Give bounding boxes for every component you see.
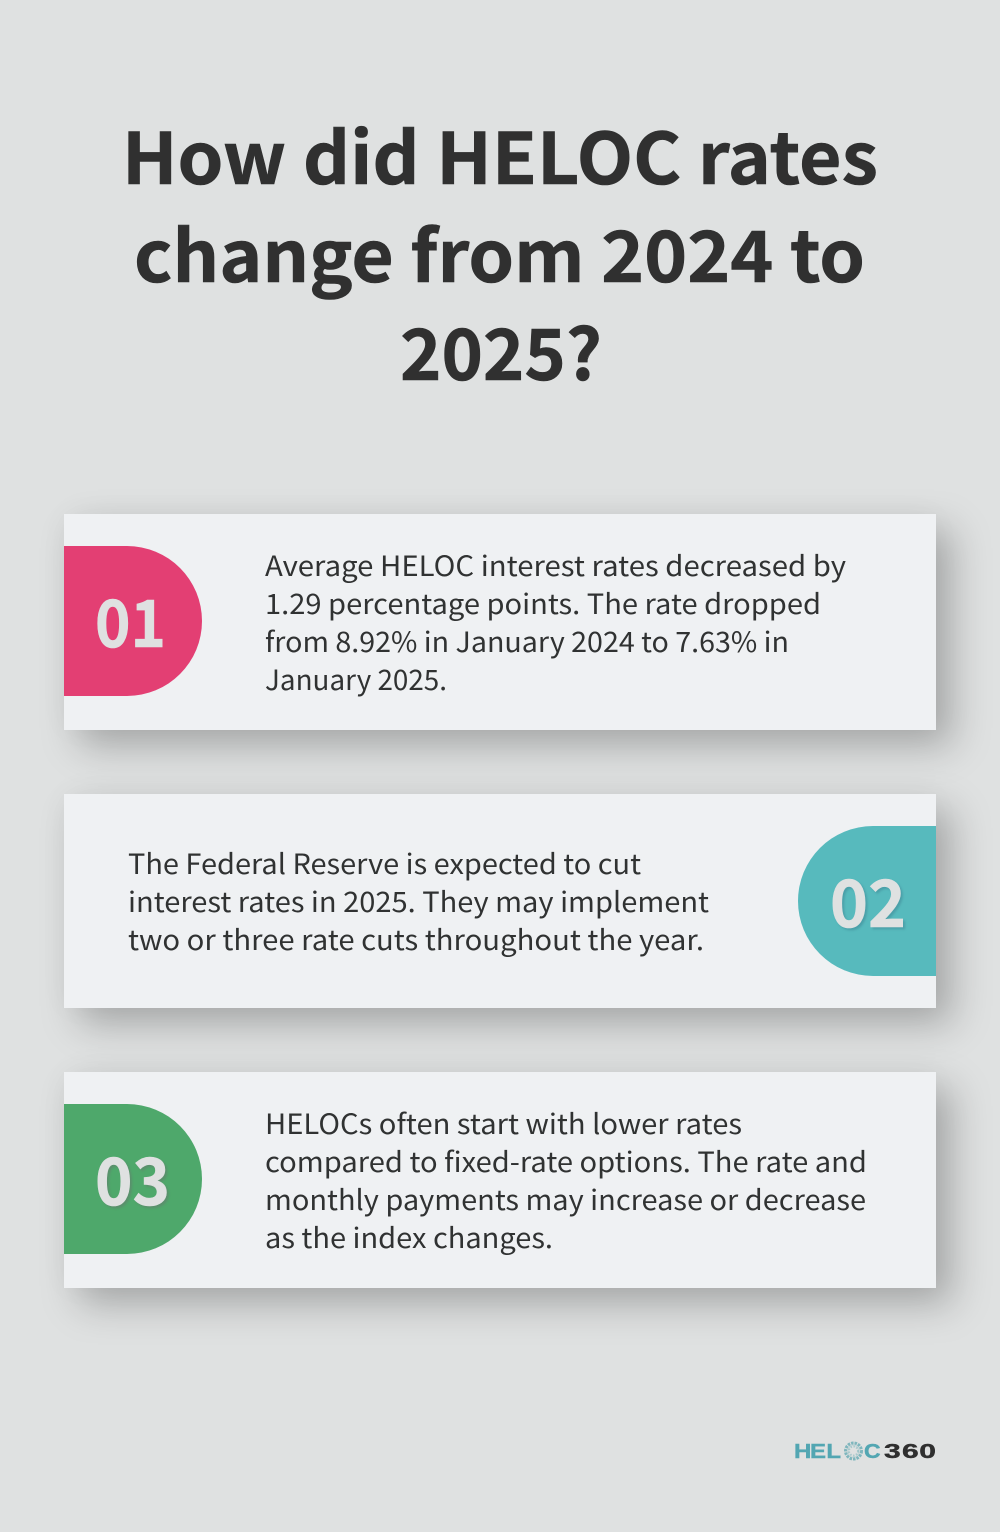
- badge: 01: [64, 546, 202, 696]
- text block: card 01: January 2025.: [265, 659, 447, 699]
- badge: 03: [64, 1104, 202, 1254]
- text block: card 03: [95, 1103, 867, 1257]
- text block: card 02: [128, 843, 906, 959]
- text block: card 03: monthly payments may increase or decrease: [265, 1179, 866, 1219]
- title: change from 2024 to: [134, 201, 865, 303]
- badge: 02: [798, 826, 936, 976]
- title: 2025?: [400, 299, 602, 401]
- text block: card 03: compared to fixed-rate options. The rate and: [265, 1141, 867, 1181]
- logo: HELOC360: HEL: [794, 1440, 841, 1463]
- panel: card 03: [64, 1072, 936, 1288]
- logo: HELOC360: O: [846, 1442, 861, 1463]
- logo: HELOC360: 360: [884, 1441, 936, 1463]
- text block: card 02: two or three rate cuts throughout the year.: [128, 919, 704, 959]
- title: How did HELOC rates: [122, 103, 878, 205]
- text block: card 02: The Federal Reserve is expected to cut: [128, 843, 641, 883]
- logo: HELOC360: C: [864, 1439, 881, 1463]
- panel: card 02: [64, 794, 936, 1008]
- title: [122, 103, 878, 401]
- text block: card 03: HELOCs often start with lower rates: [265, 1103, 742, 1143]
- text block: card 01: 01: [95, 572, 166, 666]
- text block: card 01: from 8.92% in January 2024 to 7.63% in: [265, 621, 789, 661]
- panel: card 01: [64, 514, 936, 730]
- text block: card 03: as the index changes.: [265, 1217, 553, 1257]
- text block: card 01: Average HELOC interest rates decreased by: [265, 545, 846, 585]
- text block: card 01: [95, 545, 846, 699]
- text block: card 03: 03: [95, 1130, 170, 1224]
- text block: card 02: interest rates in 2025. They may implement: [128, 881, 709, 921]
- text block: card 01: 1.29 percentage points. The rate dropped: [265, 583, 821, 623]
- text block: card 02: 02: [830, 852, 906, 946]
